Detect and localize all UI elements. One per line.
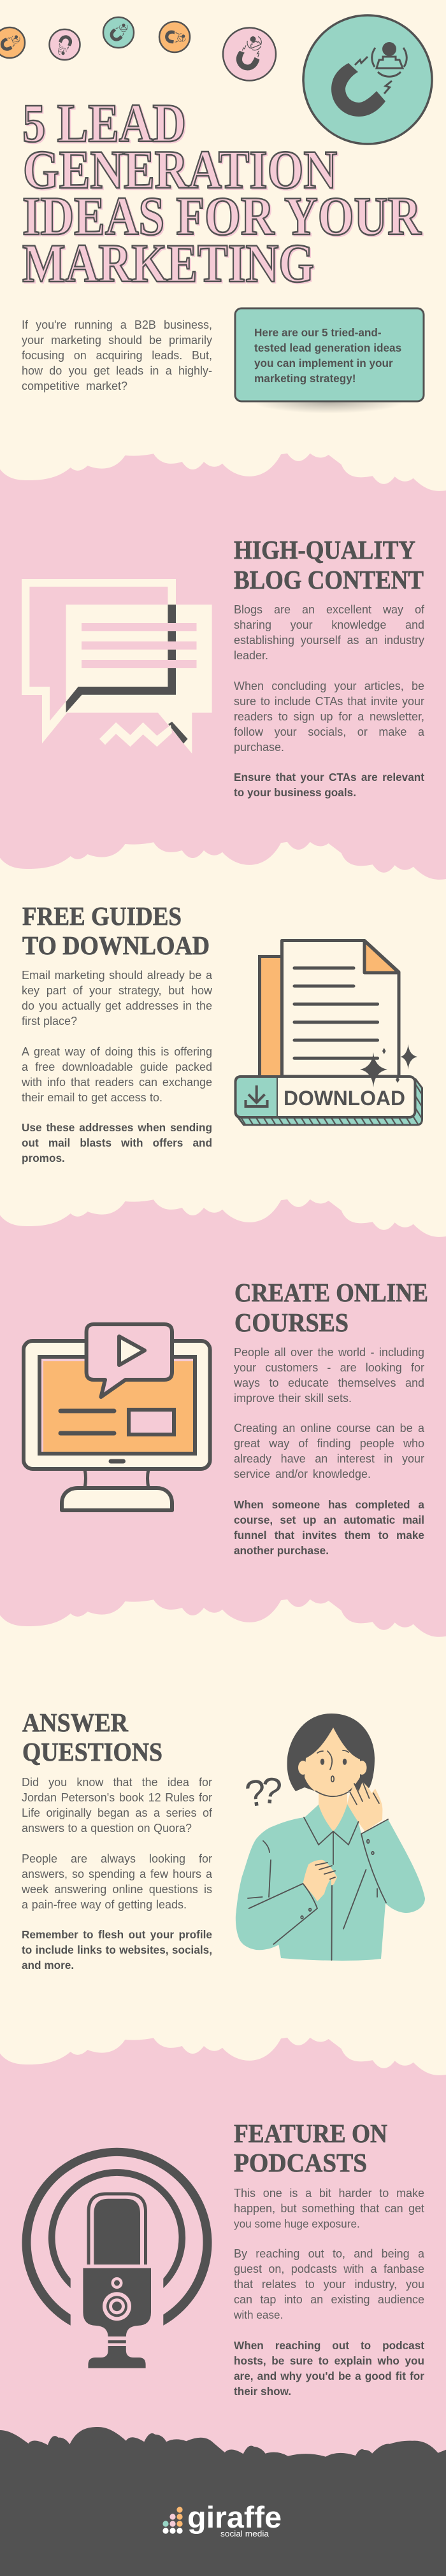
text: courses paragraph 2: already have an interest in your	[234, 1452, 424, 1465]
text: podcasts paragraph 2: guest on, podcasts with a fanbase	[234, 2263, 424, 2275]
text: answers paragraph 1: Life originally began as a series of	[22, 1807, 212, 1819]
text: guides paragraph 2: a free downloadable guide packed	[22, 1061, 212, 1073]
text: courses paragraph 1: ways to educate themselves and	[234, 1377, 424, 1389]
logo: giraffe social media: giraffe	[187, 2500, 282, 2534]
text: answers paragraph 1: answers to a question on Quora?	[22, 1822, 192, 1835]
text: intro: how do you get leads in a highly-	[22, 364, 212, 377]
text: answers paragraph 2	[22, 1852, 212, 1911]
text: podcasts paragraph 3: hosts, be sure to explain who you	[234, 2354, 424, 2367]
text: blog paragraph 1: sharing your knowledge and	[234, 619, 424, 631]
text: podcasts paragraph 2: with ease.	[234, 2308, 283, 2321]
text: answers paragraph 3	[22, 1928, 212, 1971]
text: answers paragraph 3: and more.	[22, 1959, 74, 1971]
text: podcasts paragraph 1: you some huge exposure.	[234, 2217, 360, 2230]
text: answers paragraph 2: answers, so spending a few hours a	[22, 1868, 212, 1880]
text: answers paragraph 2: a pain-free way of getting leads.	[22, 1898, 187, 1911]
heading: create online courses	[234, 1278, 428, 1337]
text: courses paragraph 3: course, set up an automatic mail	[234, 1513, 424, 1526]
text: blog paragraph 1: leader.	[234, 649, 268, 662]
callout shadow	[254, 390, 404, 413]
panel: pink section high-quality blog content	[0, 454, 446, 880]
heading: free guides to download	[22, 901, 210, 960]
text: courses paragraph 3: another purchase.	[234, 1544, 329, 1557]
text: guides paragraph 2: with info that readers can exchange	[22, 1076, 212, 1089]
icon: download document	[236, 940, 422, 1125]
text: guides paragraph 1: Email marketing should already be a	[22, 969, 212, 982]
text: podcasts paragraph 3	[234, 2339, 424, 2398]
icon: magnet circle 2	[50, 29, 80, 60]
text: answers paragraph 1	[22, 1776, 212, 1835]
heading: high-quality blog content: HIGH-QUALITY	[234, 535, 415, 564]
text: intro: focusing on acquiring leads. But,	[22, 349, 212, 362]
callout box	[235, 308, 424, 401]
text: blog paragraph 2: purchase.	[234, 741, 284, 754]
heading: feature on podcasts: FEATURE ON	[234, 2119, 387, 2148]
text: courses paragraph 2: Creating an online course can be a	[234, 1422, 424, 1435]
title: 5 LEAD	[22, 92, 186, 154]
text: guides paragraph 1	[22, 969, 212, 1027]
text: answers paragraph 2: week answering online questions is	[22, 1883, 212, 1896]
text: guides paragraph 3: out mail blasts with offers and	[22, 1136, 212, 1149]
heading: free guides to download: TO DOWNLOAD	[22, 931, 210, 960]
panel: footer	[0, 2427, 446, 2576]
text: intro: competitive market?	[22, 380, 127, 392]
text: answers paragraph 1: Did you know that the idea for	[22, 1776, 212, 1789]
heading: high-quality blog content	[234, 535, 424, 594]
heading: free guides to download: FREE GUIDES	[22, 901, 182, 931]
text: blog paragraph 3: Ensure that your CTAs are relevant	[234, 771, 424, 784]
text: guides paragraph 3	[22, 1121, 212, 1164]
heading: answer questions: ANSWER	[22, 1708, 128, 1737]
text: podcasts paragraph 2: that relates to your industry, you	[234, 2278, 424, 2291]
heading: high-quality blog content: BLOG CONTENT	[234, 565, 424, 594]
text: podcasts paragraph 2: can tap into an existing audience	[234, 2293, 424, 2306]
text: intro: your marketing should be primarily	[22, 334, 212, 347]
text: answers paragraph 2: People are always looking for	[22, 1852, 212, 1865]
text: podcasts paragraph 1: This one is a bit harder to make	[234, 2187, 424, 2200]
text: blog paragraph 2: sure to include CTAs that invite your	[234, 695, 424, 708]
text: callout: tested lead generation ideas	[254, 341, 401, 354]
heading: feature on podcasts	[234, 2119, 387, 2177]
text: answers paragraph 1: Jordan Peterson's book 12 Rules for	[22, 1791, 212, 1804]
text: guides paragraph 1: key part of your strategy, but how	[22, 984, 212, 997]
text: courses paragraph 2: great way of finding people who	[234, 1437, 424, 1450]
icon: magnet circle 4	[159, 22, 190, 52]
icon: magnet circle 5	[223, 28, 276, 80]
logo: giraffe social media: social media	[220, 2529, 270, 2538]
text: blog paragraph 1: establishing yourself as an industry	[234, 634, 424, 647]
icon: large magnet circle	[303, 15, 432, 144]
text: blog paragraph 2: follow your socials, or make a	[234, 726, 424, 738]
text: answers paragraph 3: to include links to websites, socials,	[22, 1943, 212, 1956]
heading: answer questions	[22, 1708, 162, 1766]
text: courses paragraph 3	[234, 1498, 424, 1557]
illustration: thinking person	[236, 1714, 425, 1961]
text: podcasts paragraph 3: their show.	[234, 2385, 291, 2398]
text: guides paragraph 3: Use these addresses when sending	[22, 1121, 212, 1134]
text: courses paragraph 3: When someone has completed a	[234, 1498, 424, 1511]
text: blog paragraph 3: to your business goals.	[234, 786, 356, 799]
icon: magnet circle 1	[0, 27, 25, 58]
icon: podcast microphone	[22, 2148, 212, 2368]
title: GENERATION	[23, 139, 337, 200]
heading: create online courses: COURSES	[234, 1308, 349, 1337]
icon: question marks: ?	[243, 1771, 269, 1815]
text: podcasts paragraph 2	[234, 2247, 424, 2321]
text: guides paragraph 1: first place?	[22, 1015, 77, 1027]
text: courses paragraph 3: funnel that invites them to make	[234, 1529, 424, 1542]
text: courses paragraph 1	[234, 1346, 424, 1405]
text: guides paragraph 2: their email to get access to.	[22, 1091, 162, 1104]
heading: create online courses: CREATE ONLINE	[234, 1278, 428, 1307]
icon: chat bubbles	[22, 579, 212, 754]
text: guides paragraph 3: promos.	[22, 1152, 65, 1164]
text: podcasts paragraph 3: are, and why you'd be a good fit for	[234, 2370, 424, 2382]
text: answers paragraph 3: Remember to flesh out your profile	[22, 1928, 212, 1941]
text: courses paragraph 1: your customers - are looking for	[234, 1361, 424, 1374]
icon: question marks: ?	[259, 1770, 284, 1813]
title	[22, 92, 422, 294]
icon: download document: DOWNLOAD	[284, 1087, 405, 1110]
text: callout	[254, 326, 401, 385]
text: intro	[22, 318, 212, 392]
text: blog paragraph 1: Blogs are an excellent way of	[234, 603, 424, 616]
text: guides paragraph 1: do you actually get addresses in the	[22, 999, 212, 1012]
text: podcasts paragraph 2: By reaching out to, and being a	[234, 2247, 424, 2260]
heading: answer questions: QUESTIONS	[22, 1737, 162, 1766]
icon: monitor with video	[24, 1324, 210, 1510]
text: callout: Here are our 5 tried-and-	[254, 326, 382, 339]
text: guides paragraph 2	[22, 1045, 212, 1104]
text: podcasts paragraph 3: When reaching out to podcast	[234, 2339, 424, 2352]
icon: question marks	[243, 1770, 284, 1815]
text: callout: marketing strategy!	[254, 372, 356, 385]
text: callout: you can implement in your	[254, 357, 393, 369]
text: blog paragraph 2: readers to sign up for a newsletter,	[234, 710, 424, 723]
title: MARKETING	[22, 233, 314, 294]
text: podcasts paragraph 1	[234, 2187, 424, 2230]
text: courses paragraph 1: People all over the world - including	[234, 1346, 424, 1359]
panel: pink section feature on podcasts	[0, 2038, 446, 2484]
panel: pink section create online courses	[0, 1199, 446, 1637]
logo: giraffe social media	[162, 2500, 282, 2538]
text: podcasts paragraph 1: happen, but something that can get	[234, 2202, 424, 2215]
text: courses paragraph 1: improve their skill sets.	[234, 1392, 352, 1405]
text: blog paragraph 1	[234, 603, 424, 662]
text: intro: If you're running a B2B business,	[22, 318, 212, 331]
text: courses paragraph 2: service and/or knowledge.	[234, 1468, 371, 1480]
text: blog paragraph 3	[234, 771, 424, 799]
text: guides paragraph 2: A great way of doing this is offering	[22, 1045, 212, 1058]
text: courses paragraph 2	[234, 1422, 424, 1480]
icon: magnet circle 3	[103, 17, 134, 48]
text: blog paragraph 2	[234, 680, 424, 754]
heading: feature on podcasts: PODCASTS	[234, 2148, 367, 2177]
text: blog paragraph 2: When concluding your articles, be	[234, 680, 424, 692]
